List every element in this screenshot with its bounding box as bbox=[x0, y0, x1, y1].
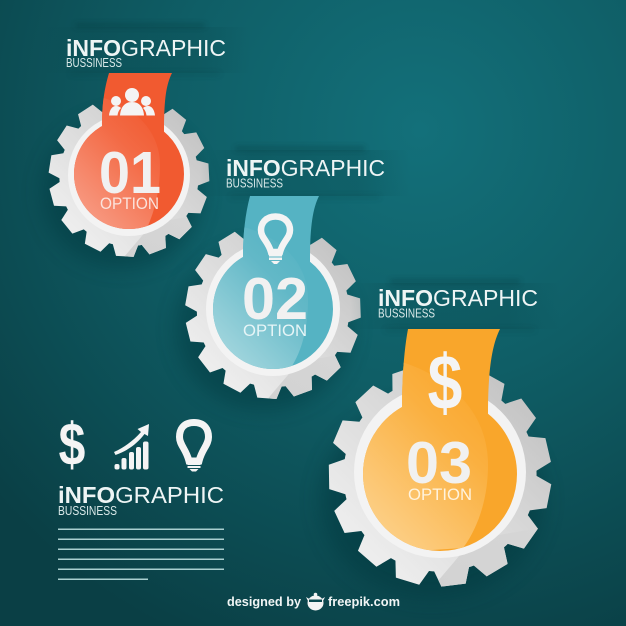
gear body 1 bbox=[48, 104, 210, 257]
icon: large light bulb bbox=[180, 422, 208, 472]
heading 1: iNFOGRAPHIC bbox=[66, 35, 226, 61]
gear shadow 1 bbox=[42, 116, 202, 268]
number 03: 03 bbox=[406, 430, 472, 496]
icon: freepik logo bbox=[306, 593, 325, 610]
gear shadow 2 bbox=[176, 246, 352, 410]
heading 2: iNFOGRAPHIC bbox=[226, 155, 385, 181]
subheading 2: BUSSINESS bbox=[226, 176, 283, 190]
title band 1 bbox=[40, 24, 250, 75]
icon: small dollar: $ bbox=[59, 411, 85, 478]
badge 3: orange ribbon and circle bbox=[363, 329, 517, 551]
gear shadow 3 bbox=[320, 402, 544, 598]
white ring 1 bbox=[68, 114, 190, 236]
subheading 1: BUSSINESS bbox=[66, 56, 122, 70]
heading 4: iNFOGRAPHIC bbox=[58, 482, 224, 508]
panel: gear 1 bbox=[44, 24, 217, 268]
icon: people bbox=[109, 88, 155, 116]
number 02: 02 bbox=[242, 266, 308, 332]
icon: dollar: $ bbox=[428, 338, 462, 426]
title band 3 bbox=[350, 280, 560, 331]
label option 1: OPTION bbox=[100, 195, 159, 213]
gear body 2 bbox=[185, 232, 361, 399]
badge 2: blue ribbon and circle bbox=[213, 196, 333, 369]
number 01: 01 bbox=[99, 140, 161, 206]
gear body 3 bbox=[328, 370, 552, 587]
panel: gear 3 bbox=[322, 279, 552, 590]
white ring 3 bbox=[354, 386, 526, 558]
badge 1: red ribbon and circle bbox=[74, 73, 184, 229]
credit: freepik.com: freepik.com bbox=[328, 595, 400, 609]
title band 2 bbox=[200, 147, 410, 198]
credit: designed by: designed by bbox=[227, 595, 301, 609]
icon: light bulb bbox=[261, 216, 290, 264]
subheading 3: BUSSINESS bbox=[378, 306, 435, 320]
label option 3: OPTION bbox=[408, 485, 472, 504]
panel: gear 2 bbox=[176, 146, 382, 410]
heading 3: iNFOGRAPHIC bbox=[378, 285, 538, 311]
text placeholder lines bbox=[58, 528, 224, 580]
label option 2: OPTION bbox=[243, 321, 307, 340]
white ring 2 bbox=[206, 242, 340, 376]
icon: growth chart bbox=[114, 424, 149, 470]
subheading 4: BUSSINESS bbox=[58, 504, 117, 518]
